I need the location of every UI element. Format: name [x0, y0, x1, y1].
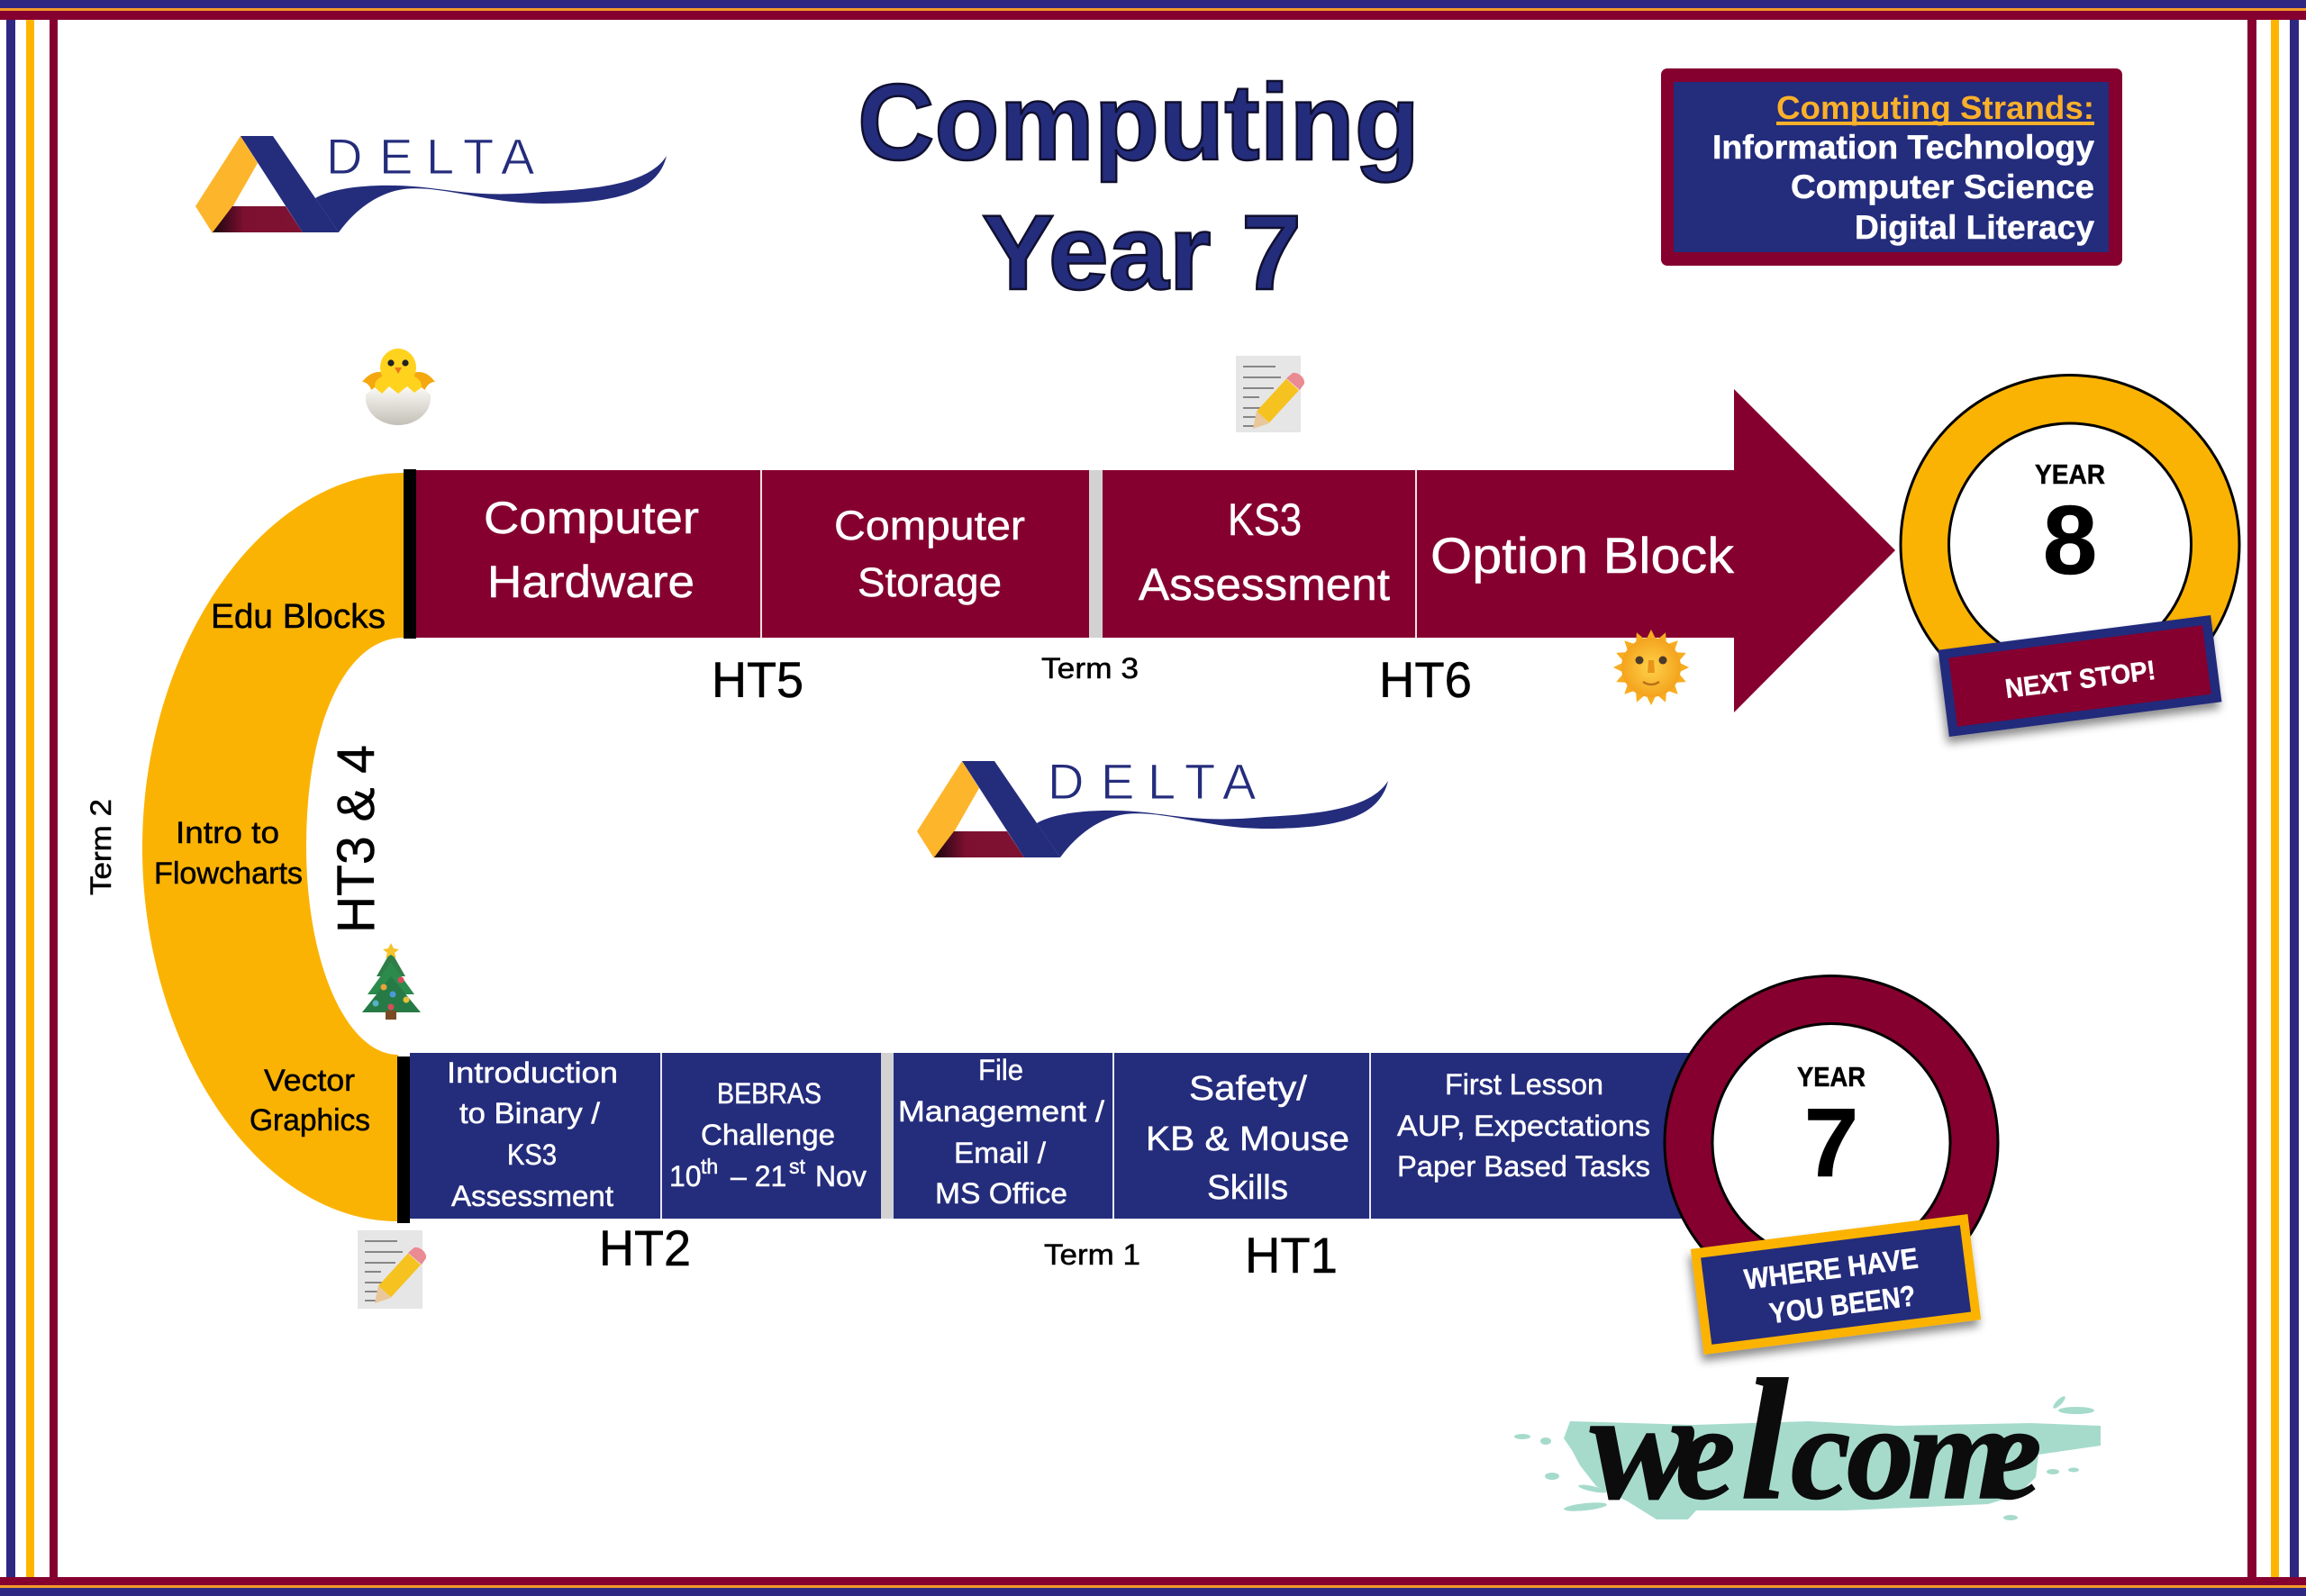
welcome graphic: e [1675, 1378, 1736, 1528]
block: File Management / Email / MS Office [898, 1054, 1104, 1210]
welcome graphic: m [1908, 1378, 2013, 1528]
welcome graphic: e [1982, 1378, 2042, 1528]
banner: where have you been: YOU BEEN? [1767, 1279, 1917, 1329]
welcome graphic: o [1847, 1378, 1914, 1528]
block: KS3 Assessment [1139, 494, 1390, 610]
panel: computing strands: Digital Literacy [1855, 209, 2094, 246]
icon: paper and pencil, term 2 [358, 1230, 426, 1309]
Year 8 next-stop badge [1901, 375, 2239, 737]
block: Computer Storage [834, 503, 1025, 605]
panel: computing strands [1661, 68, 2122, 266]
block: First Lesson: Paper Based Tasks [1397, 1150, 1650, 1183]
block: BEBRAS Challenge: Challenge [701, 1119, 835, 1151]
icon: paper and pencil, term 3 [1236, 356, 1304, 432]
title: Computing [858, 62, 1420, 183]
block: File Management / Email / MS Office: MS Office [935, 1177, 1067, 1210]
block: BEBRAS Challenge: st [789, 1155, 805, 1178]
label: Intro to Flowcharts: Flowcharts [154, 857, 303, 891]
block: First Lesson: First Lesson [1445, 1068, 1603, 1101]
block: BEBRAS Challenge: BEBRAS [717, 1077, 822, 1110]
banner: next stop: NEXT STOP! [2003, 656, 2157, 704]
label: Intro to Flowcharts: Intro to [176, 816, 279, 850]
block: Safety / KB & Mouse Skills [1146, 1070, 1349, 1207]
block: Safety / KB & Mouse Skills: KB & Mouse [1146, 1120, 1349, 1158]
block: Introduction to Binary / KS3 Assessment: to Binary / [459, 1097, 600, 1129]
label: Term 1: Term 1 [1044, 1238, 1140, 1271]
maroon arrow bar [416, 389, 1895, 712]
block: First Lesson: AUP, Expectations [1397, 1110, 1650, 1142]
label: Term 2: Term 2 [85, 799, 117, 895]
block: File Management / Email / MS Office: File [978, 1054, 1023, 1086]
block: Introduction to Binary / KS3 Assessment: KS3 [507, 1138, 557, 1171]
block: Option Block: Option Block [1430, 527, 1735, 584]
welcome graphic: c [1791, 1378, 1851, 1528]
label: HT2: HT2 [599, 1220, 691, 1276]
label: HT5: HT5 [712, 651, 803, 708]
number 7: 7 [1804, 1088, 1858, 1198]
block: Computer Storage: Storage [858, 559, 1002, 605]
block: File Management / Email / MS Office: Email / [954, 1137, 1046, 1169]
block: First Lesson [1397, 1068, 1650, 1183]
block: Safety / KB & Mouse Skills: Safety/ [1189, 1070, 1307, 1108]
ring [1925, 400, 2215, 690]
banner: where have you been: WHERE HAVE [1742, 1242, 1920, 1296]
panel: computing strands: Computer Science [1791, 168, 2094, 205]
label: HT3 & 4: HT3 & 4 [327, 745, 386, 933]
logo: Delta top left: DELTA [326, 128, 535, 185]
navy bar [410, 1053, 1711, 1219]
block: BEBRAS Challenge: 10 [669, 1160, 702, 1192]
block: BEBRAS Challenge: Nov [815, 1160, 867, 1192]
logo: Delta centre [917, 753, 1388, 858]
icon: hatching chick [362, 349, 435, 425]
logo: Delta centre: DELTA [1048, 753, 1257, 810]
banner: next stop [1938, 615, 2221, 737]
block: Computer Hardware [484, 493, 699, 607]
year label: YEAR [1797, 1061, 1866, 1093]
Year 7 where-have-you-been badge [1665, 976, 1998, 1355]
block: Computer Hardware: Computer [484, 493, 699, 543]
block: Safety / KB & Mouse Skills: Skills [1207, 1169, 1288, 1207]
label: Vector Graphics: Graphics [250, 1103, 370, 1138]
block: BEBRAS Challenge: – 21 [731, 1160, 786, 1192]
logo: Delta top left [195, 128, 667, 233]
label: Term 3: Term 3 [1041, 652, 1139, 685]
ring [1688, 1000, 1975, 1285]
block: Introduction to Binary / KS3 Assessment: Introduction [447, 1056, 618, 1089]
number 8: 8 [2043, 485, 2097, 595]
welcome graphic: w [1590, 1361, 1694, 1532]
label: HT1: HT1 [1245, 1227, 1338, 1283]
panel: computing strands: Information Technology [1712, 129, 2094, 166]
welcome graphic [1514, 1344, 2101, 1536]
label: Vector Graphics [250, 1064, 370, 1138]
block: Computer Storage: Computer [834, 503, 1025, 549]
gold curve connecting the bars [142, 469, 416, 1223]
icon: christmas tree [362, 943, 421, 1020]
block: Introduction to Binary / KS3 Assessment: Assessment [451, 1180, 613, 1212]
panel: computing strands: Computing Strands: [1776, 89, 2094, 126]
label: Vector Graphics: Vector [264, 1064, 355, 1098]
block: KS3 Assessment: KS3 [1228, 494, 1302, 545]
year label: YEAR [2035, 458, 2105, 490]
title: Year 7 [982, 194, 1302, 313]
block: File Management / Email / MS Office: Management / [898, 1095, 1104, 1128]
block: Introduction to Binary / KS3 Assessment [447, 1056, 618, 1212]
welcome graphic: l [1740, 1344, 1789, 1536]
block: BEBRAS Challenge [669, 1077, 867, 1192]
title [858, 62, 1420, 313]
icon: sun face [1613, 630, 1689, 705]
label: Intro to Flowcharts [154, 816, 303, 891]
block: Computer Hardware: Hardware [487, 557, 695, 607]
block: KS3 Assessment: Assessment [1139, 559, 1390, 610]
label: Edu Blocks: Edu Blocks [211, 598, 386, 636]
label: HT6: HT6 [1379, 651, 1472, 708]
banner: where have you been [1691, 1214, 1981, 1355]
block: BEBRAS Challenge: th [701, 1155, 718, 1178]
